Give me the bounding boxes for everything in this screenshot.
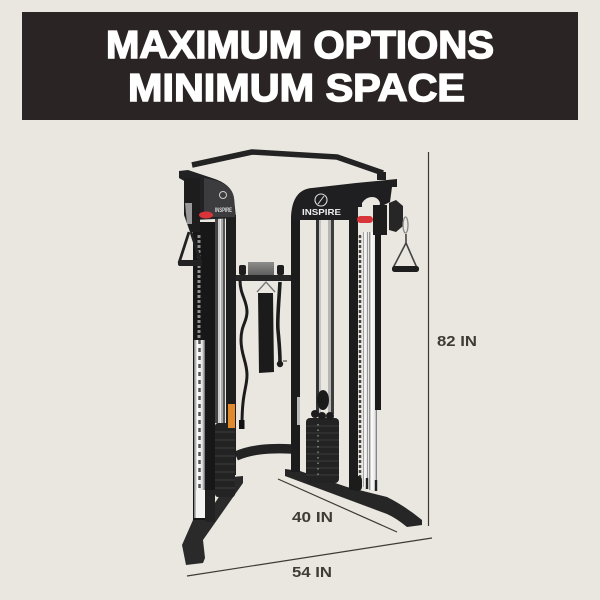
dimension: width line: [187, 538, 432, 576]
dimension: height line: [428, 152, 430, 526]
strap: [258, 293, 274, 373]
dimension: depth line: [278, 479, 397, 532]
left red knob: [199, 212, 213, 218]
label: 82 IN: 82 IN: [437, 333, 477, 350]
left tower: [178, 170, 236, 522]
left plate logo: [220, 192, 226, 198]
left base: [182, 476, 243, 565]
top bar clamp: [377, 172, 386, 180]
accessory shelf: [236, 262, 292, 429]
strap hanger: [257, 282, 275, 292]
right weight stack: [306, 418, 339, 483]
right pulley: [389, 200, 403, 232]
left front upright: [193, 222, 215, 520]
carabiner: [403, 217, 408, 233]
right handle: [393, 234, 417, 268]
knobs: [239, 265, 246, 275]
left tower: INSPIRE: [215, 208, 232, 214]
title banner: [22, 12, 578, 120]
shelf bar: [236, 275, 292, 281]
right tower: INSPIRE: [302, 207, 341, 217]
chrome rods: [363, 232, 368, 487]
left handle: [179, 232, 201, 263]
label: 54 IN: 54 IN: [292, 564, 332, 581]
tray: [248, 262, 274, 276]
right base: [285, 469, 422, 527]
foot bracket: [352, 476, 362, 491]
weight selector top: [311, 410, 319, 418]
orange weight tag: [228, 404, 235, 428]
rope: [278, 282, 280, 362]
title line 1: MAXIMUM OPTIONS: [106, 24, 494, 67]
left cables: [215, 218, 218, 423]
bracket block: [373, 205, 387, 235]
left top plate: [179, 170, 236, 220]
left rear post: [226, 215, 236, 475]
label: 40 IN: 40 IN: [292, 509, 333, 526]
rear arch: [236, 449, 292, 456]
right front post: [349, 218, 358, 490]
right inner post: [291, 218, 300, 472]
title line 2: MINIMUM SPACE: [128, 67, 465, 110]
top bar: [192, 152, 383, 173]
curl bar: [240, 280, 247, 425]
right top plate: [291, 179, 397, 220]
left weight stack: [215, 423, 235, 497]
right plate logo: [315, 194, 327, 206]
right red knob: [357, 216, 373, 223]
left pulley bracket: [184, 178, 200, 232]
right cables: [316, 219, 319, 414]
right tower: [291, 172, 419, 491]
gym machine: [178, 152, 422, 565]
